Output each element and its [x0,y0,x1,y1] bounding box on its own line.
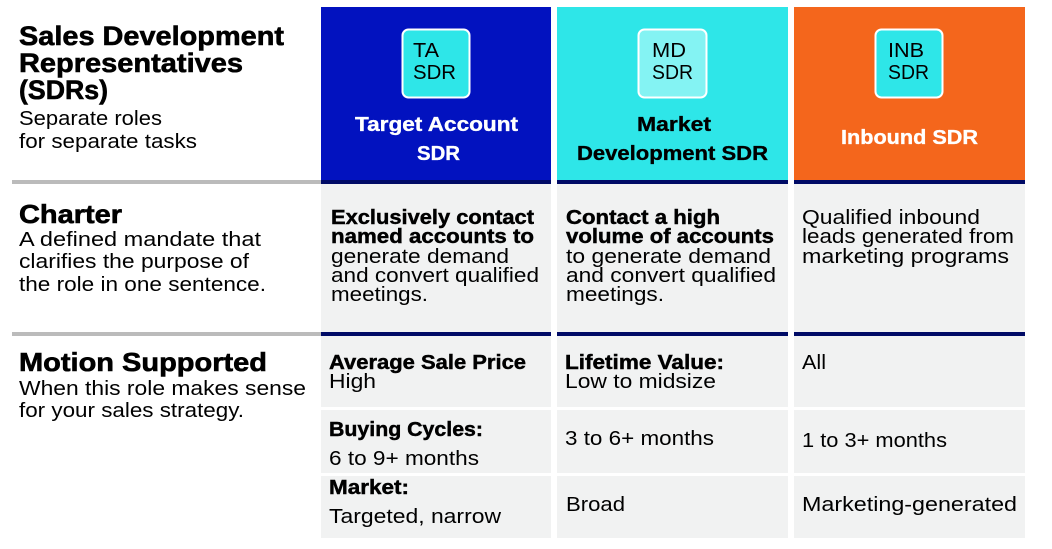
cell: market development: Broad [566,494,625,516]
cell: buying cycles target account: 6 to 9+ months [329,448,479,470]
cell: average sale price [321,336,551,407]
panel: market development charter [557,184,788,332]
role name: target account sdr: Target Account [355,114,518,136]
cell: buying cycles target account [321,410,551,473]
cell: buying cycles inbound [794,410,1025,473]
role name: target account sdr: SDR [417,143,461,165]
cell: buying cycles target account: Buying Cycles: [329,419,483,441]
text: motion description: When this role makes sense [19,378,306,400]
heading: sales development representatives: (SDRs) [19,75,108,105]
icon: TA SDR badge: SDR [413,62,456,84]
icon: MD SDR badge: SDR [652,62,693,84]
role name: market development sdr: Development SDR [577,143,769,165]
panel: market development charter: volume of accounts [566,226,774,248]
cell: buying cycles market development [557,410,788,473]
role name: target account sdr [355,114,518,165]
heading: sales development representatives: Sales Development [19,21,284,51]
role name: inbound sdr: Inbound SDR [841,127,979,149]
cell: market target account: Targeted, narrow [329,506,502,528]
role name: market development sdr: Market [637,114,711,136]
cell: average sale price: High [329,371,376,393]
subtitle: separate roles: Separate roles [19,108,162,130]
text: charter description [19,229,266,296]
panel: inbound sdr header [794,7,1025,180]
cell: inbound motion: All [802,352,826,374]
text: charter description: clarifies the purpose of [19,251,249,273]
text: motion description: for your sales strategy. [19,400,244,422]
heading: charter: Charter [19,199,122,229]
panel: inbound charter: leads generated from [802,226,1014,248]
panel: inbound charter: Qualified inbound [802,207,980,229]
cell: lifetime value: Low to midsize [565,371,716,393]
panel: market development charter: meetings. [566,284,664,306]
cell: market development [557,476,788,538]
panel: inbound charter [794,184,1025,332]
icon: MD SDR badge [638,30,706,98]
text: charter description: the role in one sentence. [19,274,266,296]
heading: sales development representatives: Representatives [19,48,243,78]
panel: market development sdr header [557,7,788,180]
panel: market development charter: and convert qualified [566,265,776,287]
text: motion description [19,378,306,422]
icon: MD SDR badge: MD [652,40,686,62]
heading: sales development representatives [19,21,284,105]
cell: lifetime value: Lifetime Value: [565,352,724,374]
cell: market inbound [794,476,1025,538]
panel: target account charter [321,184,551,332]
cell: market target account: Market: [329,477,409,499]
role name: market development sdr [577,114,769,165]
panel: market development charter: Contact a high [566,207,720,229]
panel: target account charter: and convert qualified [331,265,539,287]
panel: target account charter: generate demand [331,246,509,268]
panel: target account sdr header [321,7,551,180]
panel: target account charter: named accounts to [331,226,534,248]
panel: market development charter: to generate demand [566,246,771,268]
icon: INB SDR badge [876,30,942,98]
cell: market inbound: Marketing-generated [802,494,1017,516]
icon: TA SDR badge: TA [413,40,440,62]
heading: motion supported: Motion Supported [19,347,267,377]
cell: inbound motion [794,336,1025,407]
text: charter description: A defined mandate that [19,229,262,251]
icon: INB SDR badge: INB [888,40,924,62]
panel: target account charter: Exclusively contact [331,207,534,229]
icon: INB SDR badge: SDR [888,62,929,84]
panel: inbound charter: marketing programs [802,246,1009,268]
cell: market target account [321,476,551,538]
cell: average sale price: Average Sale Price [329,352,526,374]
subtitle: separate roles: for separate tasks [19,131,197,153]
panel: target account charter: meetings. [331,284,428,306]
subtitle: separate roles [19,108,197,153]
cell: lifetime value [557,336,788,407]
icon: TA SDR badge [402,30,470,98]
cell: buying cycles market development: 3 to 6+ months [565,428,714,450]
cell: buying cycles inbound: 1 to 3+ months [802,430,947,452]
